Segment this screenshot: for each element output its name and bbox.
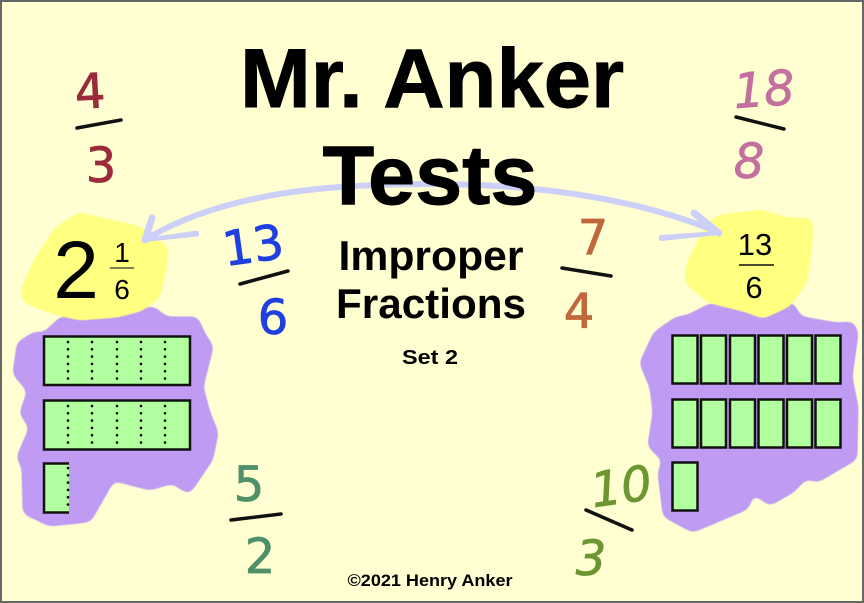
improper fraction 13/6: 6 bbox=[745, 270, 763, 305]
fraction 4/3: 4 bbox=[73, 63, 107, 121]
title bbox=[240, 31, 624, 222]
set label: Set 2 bbox=[402, 347, 458, 369]
fraction 13/6: 13 bbox=[219, 214, 287, 278]
copyright: ©2021 Henry Anker bbox=[348, 572, 513, 590]
fraction 18/8: 8 bbox=[734, 134, 764, 190]
subtitle: Fractions bbox=[336, 280, 526, 327]
curved double-headed arrow bbox=[145, 184, 719, 240]
fraction 4/3 bbox=[73, 63, 121, 194]
left yellow blob bbox=[26, 217, 164, 316]
fraction 7/4 bbox=[562, 210, 611, 340]
title: Mr. Anker bbox=[240, 31, 624, 125]
fraction 10/3 bbox=[576, 455, 655, 587]
right yellow blob bbox=[689, 214, 809, 314]
left purple blob bbox=[17, 311, 214, 522]
fraction 10/3: 10 bbox=[587, 455, 655, 519]
mixed number 2 1/6: 2 bbox=[53, 225, 99, 316]
right bars: thirteen sixths bbox=[672, 336, 840, 510]
fraction 7/4: 7 bbox=[578, 210, 608, 266]
subtitle bbox=[336, 232, 526, 327]
improper fraction 13/6: 13 bbox=[738, 227, 772, 262]
improper fraction 13/6 bbox=[738, 227, 774, 305]
mixed number 2 1/6 bbox=[53, 225, 134, 316]
fraction 13/6 bbox=[219, 214, 288, 346]
mixed number 2 1/6: 1 bbox=[114, 237, 130, 268]
title: Tests bbox=[322, 128, 538, 222]
fraction 10/3: 3 bbox=[576, 531, 606, 587]
fraction 5/2: 5 bbox=[234, 457, 264, 513]
subtitle: Improper bbox=[338, 232, 524, 279]
fraction 7/4: 4 bbox=[564, 284, 594, 340]
fraction 18/8: 18 bbox=[732, 60, 796, 120]
fraction 5/2 bbox=[231, 457, 281, 585]
right purple blob bbox=[644, 307, 854, 528]
mixed number 2 1/6: 6 bbox=[114, 274, 130, 305]
fraction 4/3: 3 bbox=[86, 138, 116, 194]
left bars: two wholes and one sixth bbox=[44, 336, 190, 512]
fraction 18/8 bbox=[732, 60, 796, 190]
fraction 13/6: 6 bbox=[258, 290, 288, 346]
fraction 5/2: 2 bbox=[245, 529, 275, 585]
